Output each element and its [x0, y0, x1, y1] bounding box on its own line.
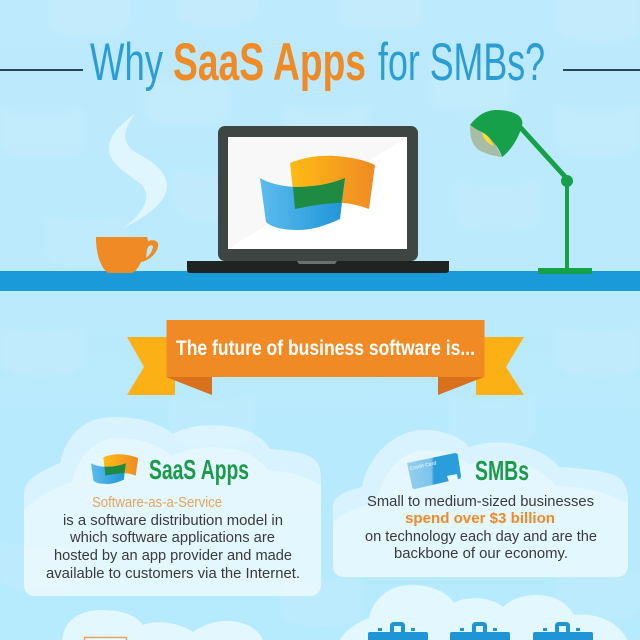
- icon: SaaS logo: [260, 156, 375, 230]
- panel: SMBs cloud: [333, 430, 628, 577]
- banner body: [166, 320, 484, 377]
- panel: SaaS Apps cloud: [24, 417, 321, 596]
- banner text: The future of business software is...: [176, 337, 475, 360]
- text: SaaS definition: which software applications are: [69, 530, 275, 546]
- laptop: [187, 126, 449, 273]
- title: SaaS Apps: [173, 33, 366, 92]
- laptop screen: [228, 137, 407, 249]
- heading: SaaS Apps: SaaS Apps: [149, 454, 249, 485]
- icon: briefcase 3: [533, 622, 593, 640]
- text: SaaS definition: Software-as-a-Service: [92, 495, 222, 511]
- title: Why: [90, 33, 163, 92]
- heading: SMBs: SMBs: [475, 455, 529, 486]
- text: SaaS definition: [46, 495, 300, 582]
- icon: desk lamp: [470, 110, 592, 274]
- panel: lower right cloud: [340, 585, 627, 640]
- icon: briefcase 2: [450, 622, 510, 640]
- text: SMBs description: backbone of our economy.: [394, 546, 568, 562]
- laptop lid: [218, 126, 418, 261]
- icon: orange outline box: [84, 638, 126, 640]
- icon: credit card: [407, 453, 461, 489]
- title line: left: [0, 69, 83, 71]
- text: SMBs description: [365, 494, 597, 562]
- text: SMBs description: spend over $3 billion: [405, 511, 555, 527]
- text: SMBs description: Small to medium-sized businesses: [367, 494, 594, 510]
- steam: [109, 114, 167, 228]
- laptop notch: [297, 261, 337, 264]
- text: SaaS definition: is a software distribution model in: [63, 513, 283, 529]
- laptop base: [187, 261, 449, 273]
- icon: credit card: Credit Card: [409, 460, 437, 472]
- banner left fold: [166, 377, 212, 395]
- title: [90, 33, 545, 92]
- icon: coffee cup: [96, 237, 158, 273]
- text: SaaS definition: hosted by an app provider and made: [54, 548, 292, 564]
- desk: [0, 271, 640, 291]
- banner right tail: [476, 337, 524, 395]
- banner right fold: [438, 377, 484, 395]
- title: for SMBs?: [378, 33, 545, 92]
- banner: [127, 320, 524, 395]
- icon: briefcase 1: [368, 622, 428, 640]
- icon: SaaS logo small: [91, 454, 138, 484]
- panel: lower left cloud: [62, 610, 263, 640]
- text: SaaS definition: available to customers via the Internet.: [46, 566, 300, 582]
- text: SMBs description: on technology each day and are the: [365, 529, 597, 545]
- title line: right: [563, 69, 640, 71]
- banner left tail: [127, 337, 175, 395]
